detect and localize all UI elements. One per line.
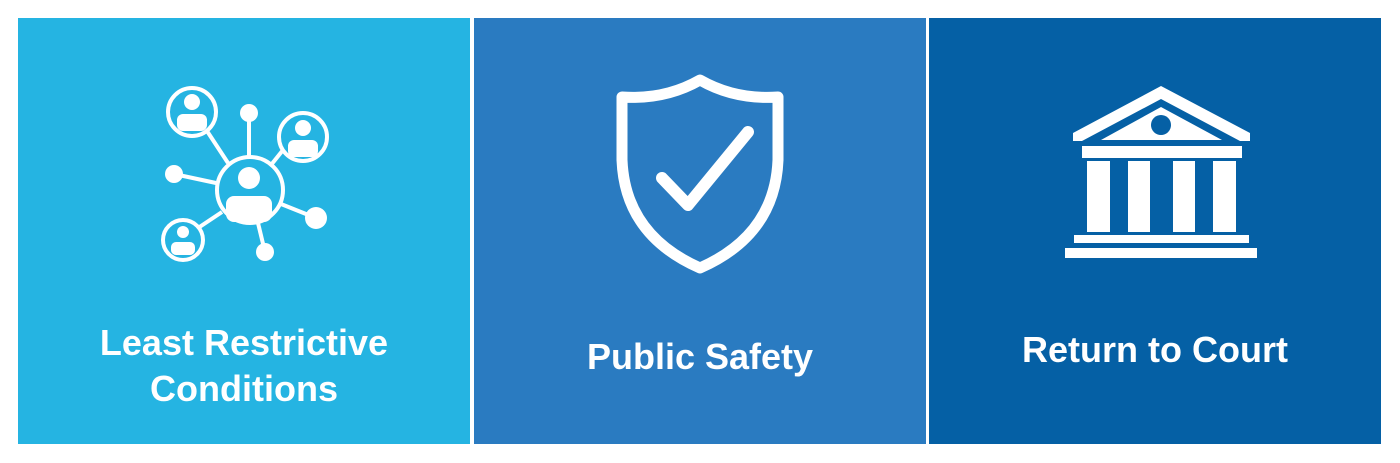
heading: Conditions bbox=[150, 368, 338, 409]
heading: Return to Court bbox=[1022, 329, 1288, 370]
heading bbox=[100, 322, 388, 409]
panel: public safety bbox=[474, 18, 926, 444]
heading: Least Restrictive bbox=[100, 322, 388, 363]
panel: least restrictive conditions bbox=[18, 18, 470, 444]
icon: shield with check bbox=[616, 74, 784, 274]
icon: network of people bbox=[161, 86, 329, 262]
panel: return to court bbox=[929, 18, 1381, 444]
heading: Public Safety bbox=[587, 336, 813, 377]
icon: courthouse bbox=[1065, 86, 1257, 258]
